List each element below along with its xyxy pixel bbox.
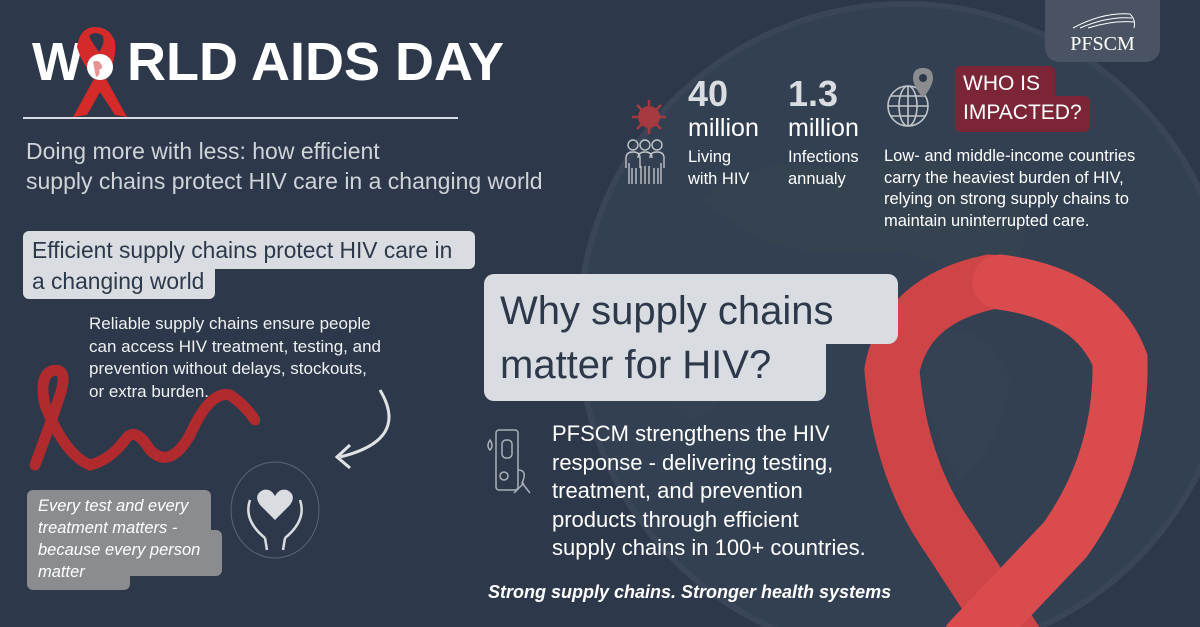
heading box: efficient supply chains: a changing world xyxy=(32,268,204,294)
text block: reliable supply chains: or extra burden. xyxy=(89,382,209,400)
text block: PFSCM strengthens: products through efficient xyxy=(552,506,799,532)
text block: reliable supply chains: Reliable supply chains ensure people xyxy=(89,314,371,333)
stat: 40 million: Living xyxy=(688,148,731,166)
heading box: why supply chains: Why supply chains xyxy=(500,289,833,333)
callout: every test: matter xyxy=(38,563,85,581)
text block: PFSCM strengthens: supply chains in 100+ countries. xyxy=(552,535,866,560)
text block: low and middle income: Low- and middle-income countries xyxy=(884,147,1135,165)
icon: test kit xyxy=(487,429,530,494)
heading box: who is impacted xyxy=(955,66,1090,132)
logo: PFSCM: PFSCM xyxy=(1070,33,1135,55)
title: W RLD AIDS DAY xyxy=(32,32,504,92)
heading box: who is impacted: IMPACTED? xyxy=(963,101,1082,124)
stat: 1.3 million: annualy xyxy=(788,170,846,188)
callout: every test xyxy=(27,490,222,590)
text block: PFSCM strengthens xyxy=(552,421,866,560)
logo: PFSCM xyxy=(1045,0,1160,62)
stat: 40 million xyxy=(688,73,759,188)
text block: low and middle income xyxy=(884,147,1135,230)
icon: people xyxy=(625,139,665,184)
stat: 40 million: 40 xyxy=(688,73,728,114)
text block: PFSCM strengthens: treatment, and prevention xyxy=(552,478,803,503)
tagline: Strong supply chains. Stronger health systems xyxy=(488,582,891,602)
text block: reliable supply chains xyxy=(89,314,381,400)
heading box: why supply chains xyxy=(484,274,898,401)
hands ribbon image xyxy=(864,254,1148,627)
icon: virus xyxy=(632,100,666,134)
stat: 1.3 million: million xyxy=(788,114,859,142)
icon: red ribbon decoration xyxy=(30,365,260,471)
heading box: who is impacted: WHO IS xyxy=(963,72,1040,95)
stat: 1.3 million: 1.3 xyxy=(788,73,838,114)
text block: low and middle income: relying on strong supply chains to xyxy=(884,190,1129,208)
callout: every test: Every test and every xyxy=(38,497,188,515)
subtitle xyxy=(26,138,543,194)
stat: 40 million: million xyxy=(688,114,759,142)
arrow xyxy=(334,389,390,469)
heading box: why supply chains: matter for HIV? xyxy=(500,343,771,387)
stat: 1.3 million: Infections xyxy=(788,148,859,166)
heading box: efficient supply chains: Efficient supply chains protect HIV care in xyxy=(32,237,452,263)
text block: reliable supply chains: prevention without delays, stockouts, xyxy=(89,359,367,378)
icon: ribbon with globe xyxy=(73,27,127,117)
text block: reliable supply chains: can access HIV treatment, testing, and xyxy=(89,336,381,356)
subtitle: supply chains protect HIV care in a changing world xyxy=(26,168,543,194)
text block: PFSCM strengthens: response - delivering testing, xyxy=(552,450,833,474)
text block: PFSCM strengthens: PFSCM strengthens the HIV xyxy=(552,421,830,446)
icon: heart in hands xyxy=(230,462,320,558)
icon: globe with pin xyxy=(887,68,933,127)
callout: every test: because every person xyxy=(38,541,200,559)
subtitle: Doing more with less: how efficient xyxy=(26,138,380,164)
heading box: efficient supply chains xyxy=(23,231,475,299)
title xyxy=(32,27,504,117)
stat: 1.3 million xyxy=(788,73,859,188)
callout: every test: treatment matters - xyxy=(38,519,177,537)
text block: low and middle income: maintain uninterrupted care. xyxy=(884,212,1089,230)
text block: low and middle income: carry the heaviest burden of HIV, xyxy=(884,168,1124,186)
stat: 40 million: with HIV xyxy=(688,170,749,188)
